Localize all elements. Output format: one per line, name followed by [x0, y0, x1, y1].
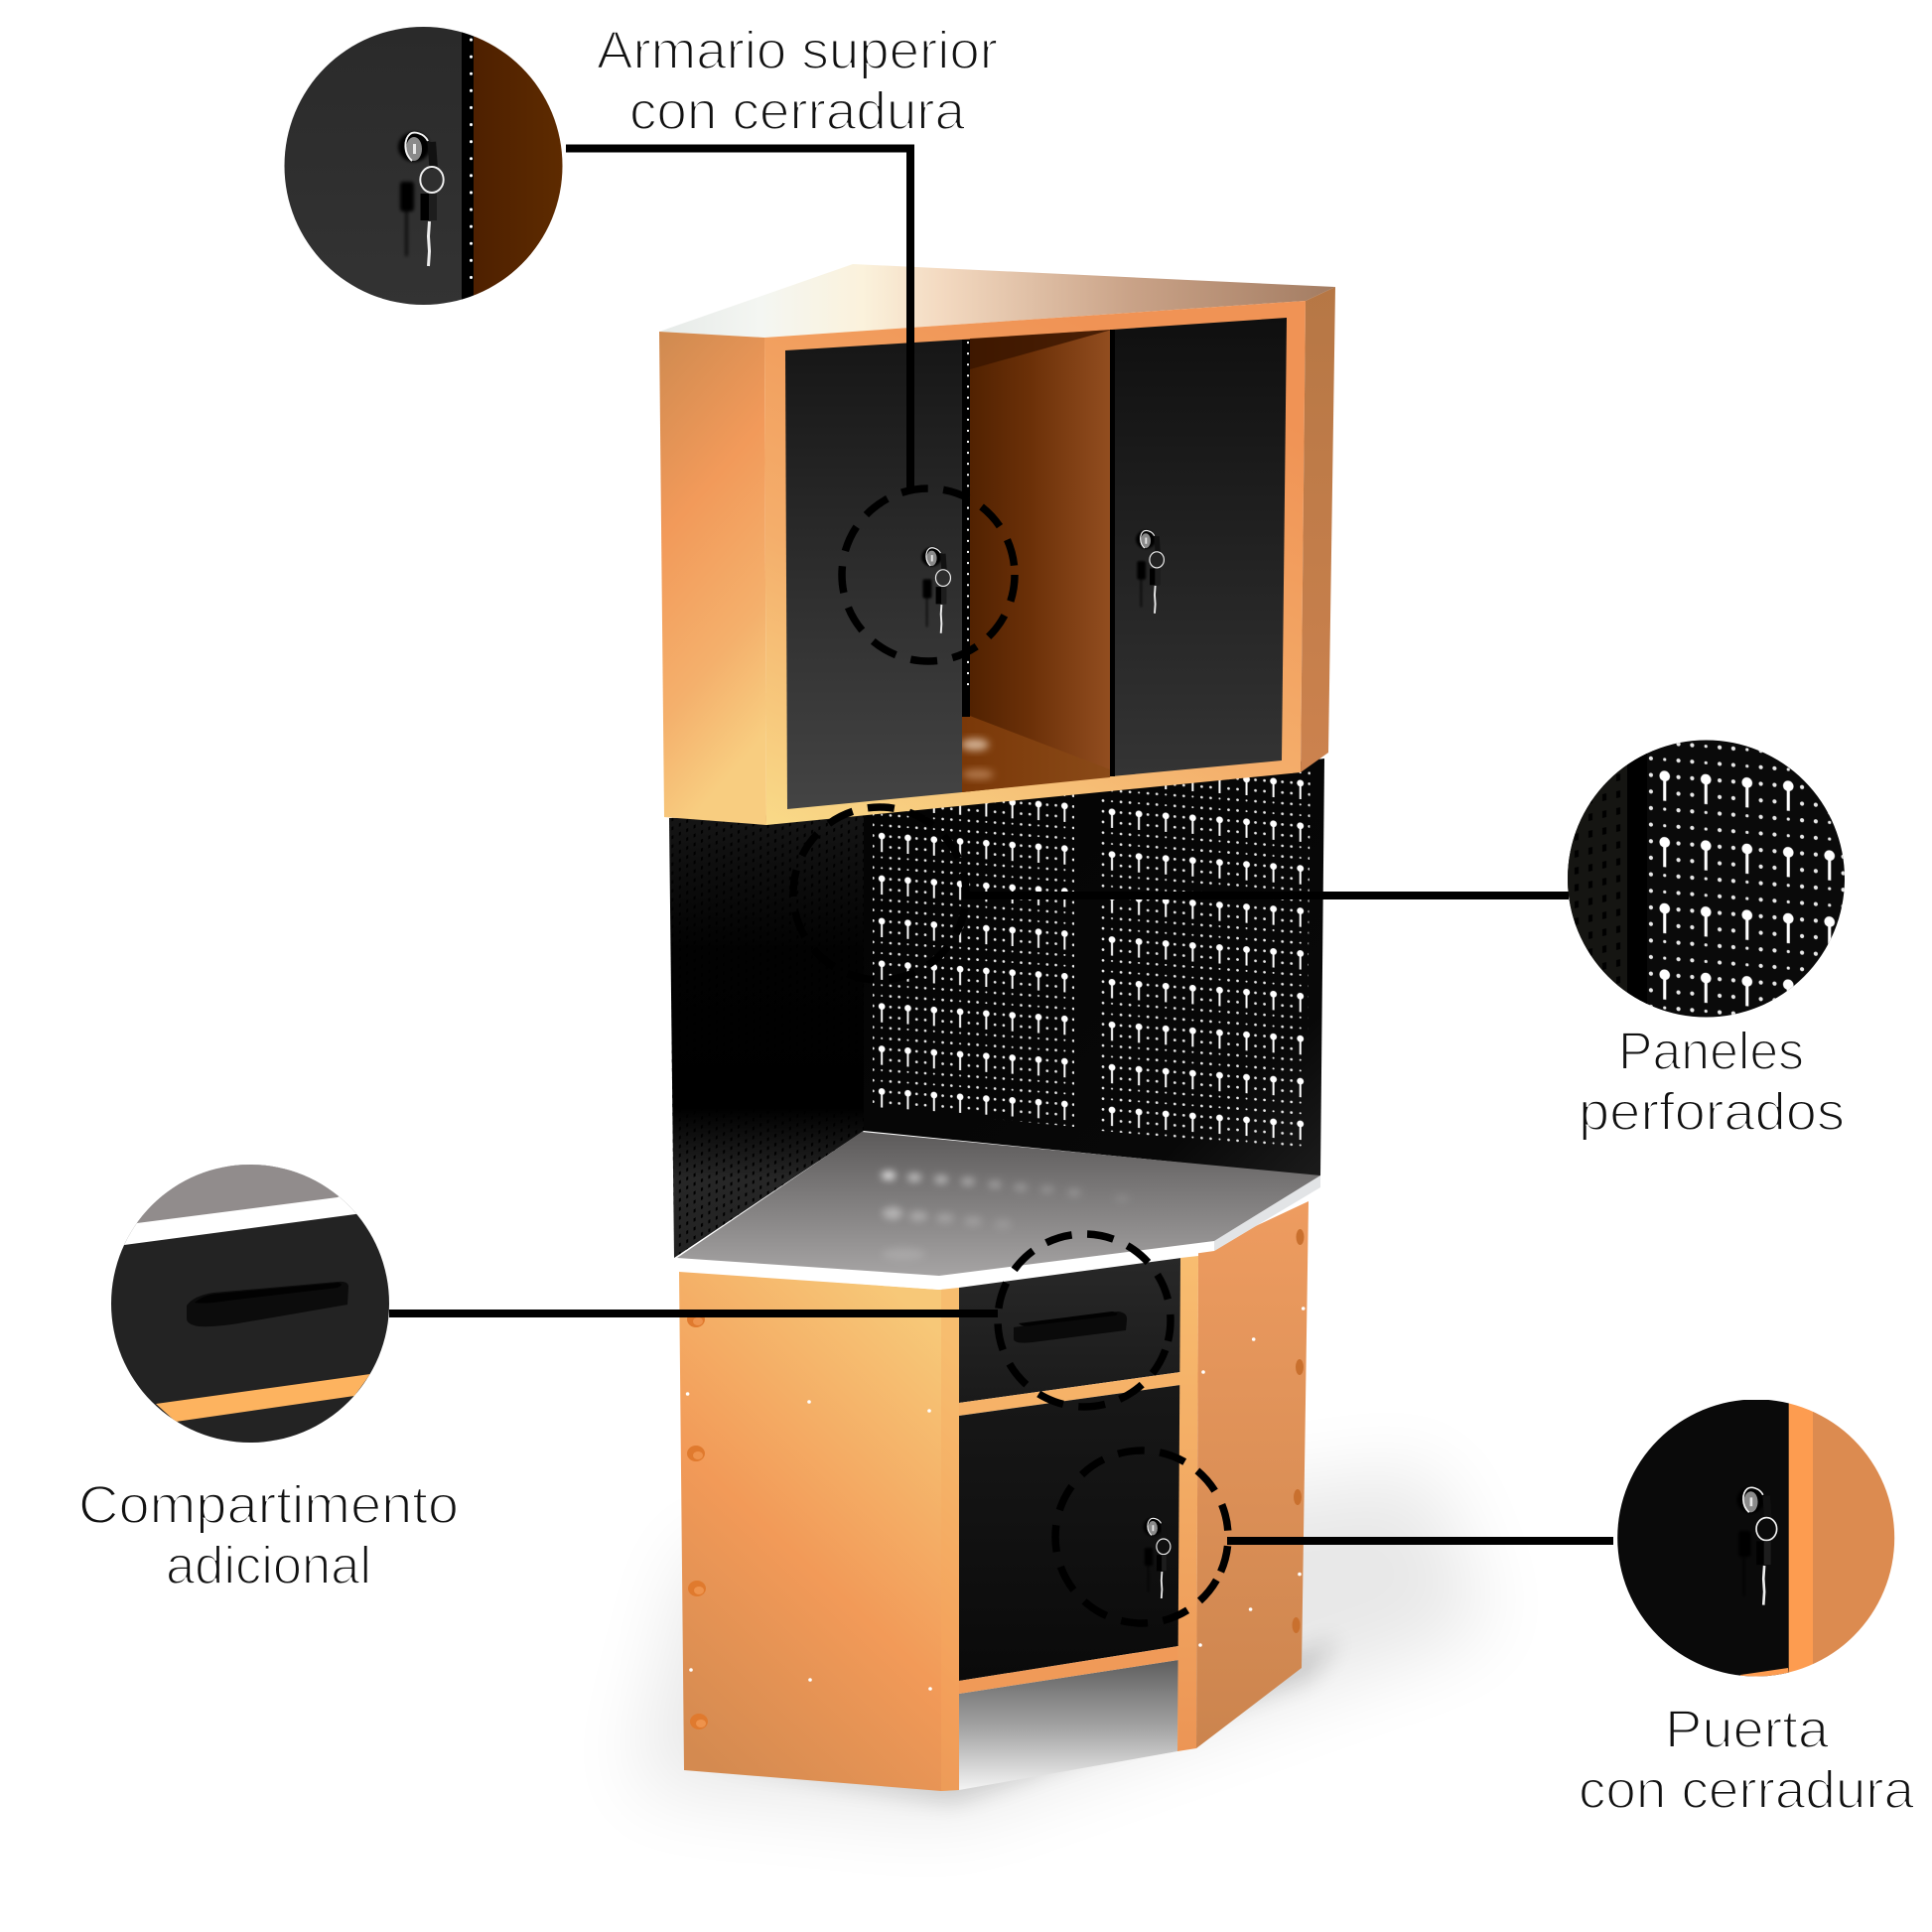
icon: lock with key — [398, 132, 444, 266]
leader line: drawer — [389, 1310, 998, 1317]
door edge with perforated strip — [962, 340, 970, 717]
label: Armario superior con cerradura — [597, 21, 998, 141]
orange strip — [156, 1374, 370, 1422]
counter reflections — [882, 1172, 1129, 1260]
perforated holes left section — [873, 794, 1074, 1127]
icon: lower door lock — [1144, 1518, 1171, 1598]
dashed circle: pegboard — [779, 793, 980, 994]
right front strip — [1177, 1256, 1198, 1751]
dashed circle: lower door — [1024, 1419, 1260, 1655]
perforation pattern — [1648, 740, 1847, 1018]
right door — [1112, 318, 1287, 776]
panel: upper cabinet — [659, 264, 1335, 825]
bumps on right panel — [1293, 1229, 1305, 1633]
right door shadow edge — [1110, 330, 1115, 776]
counter grey and white band — [124, 1165, 356, 1245]
label: Paneles perforados — [1579, 1022, 1845, 1142]
cabinet right face — [1301, 287, 1335, 772]
cabinet left face — [659, 332, 766, 825]
open interior — [961, 330, 1112, 792]
detail circle: drawer — [111, 1165, 389, 1443]
cabinet front frame — [764, 301, 1306, 825]
dashed circle: drawer — [973, 1209, 1195, 1432]
detail circle: upper lock — [284, 27, 563, 305]
perforated strip — [462, 27, 474, 305]
label: Compartimento adicional — [78, 1475, 459, 1595]
lower strip — [959, 1646, 1178, 1694]
lower door — [959, 1385, 1180, 1681]
label: Armario superior con cerradura: Armario superior — [597, 21, 998, 80]
leader line: door — [1227, 1537, 1613, 1545]
icon: right door lock — [1136, 530, 1164, 614]
label: Compartimento adicional: adicional — [166, 1536, 371, 1595]
leader line: upper cabinet — [566, 149, 910, 488]
left base panel — [679, 1272, 959, 1791]
label: Puerta con cerradura — [1579, 1700, 1915, 1820]
panel: left pegboard wall — [669, 813, 864, 1258]
right base panel — [1196, 1201, 1309, 1748]
drawer shelf strip — [959, 1372, 1180, 1416]
detail circle: perforated panels — [1568, 740, 1847, 1018]
screw dots — [686, 1307, 1305, 1691]
leader line: pegboard — [965, 892, 1569, 899]
detail circle: lower door — [1617, 1400, 1902, 1678]
label: Paneles perforados: perforados — [1579, 1082, 1845, 1142]
panel: base cabinet — [679, 1201, 1309, 1791]
pegboard section — [669, 759, 1324, 1258]
label: Puerta con cerradura: Puerta — [1665, 1700, 1830, 1759]
left door — [785, 340, 962, 809]
label: Armario superior con cerradura: con cerradura — [629, 81, 966, 141]
floor shadow — [635, 1469, 1489, 1817]
perforated holes right section — [1101, 764, 1311, 1150]
icon: drawer handle — [1014, 1311, 1127, 1343]
panel: counter top — [674, 1132, 1320, 1290]
label: Paneles perforados: Paneles — [1618, 1022, 1804, 1081]
drawer front — [959, 1258, 1181, 1403]
label: Compartimento adicional: Compartimento — [78, 1475, 459, 1535]
icon: lock with key — [1736, 1487, 1777, 1605]
dashed circle: upper lock — [842, 488, 1015, 661]
open gap under door — [959, 1660, 1178, 1790]
panel: back pegboard wall — [864, 759, 1324, 1176]
label: Puerta con cerradura: con cerradura — [1579, 1760, 1915, 1820]
cabinet top face — [659, 264, 1335, 338]
bumps on left panel — [687, 1311, 708, 1729]
icon: drawer handle — [187, 1282, 348, 1326]
left panel corner strip — [941, 1288, 959, 1791]
icon: left door lock — [921, 547, 950, 633]
